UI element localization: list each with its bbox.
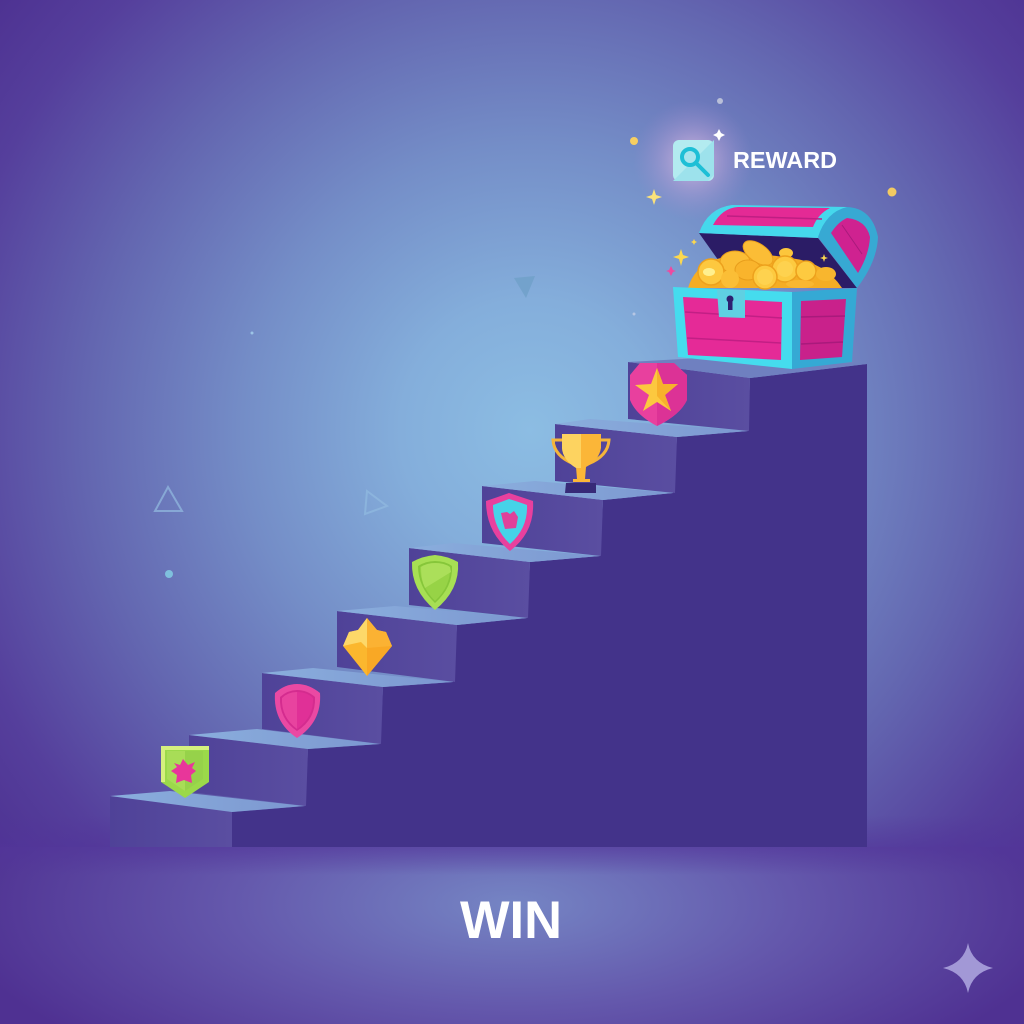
sparkles and gold dots (630, 98, 896, 316)
step 8 (628, 358, 867, 431)
reward label (633, 100, 837, 220)
icon: pink shield with gold star (630, 363, 687, 426)
icon: green shield with pink star (161, 746, 209, 798)
icon: pink and blue shield (486, 493, 533, 551)
staircase (110, 358, 867, 847)
chest latch with keyhole (717, 290, 745, 318)
chest lid (699, 205, 878, 288)
icon glow (633, 100, 753, 220)
label text: REWARD (733, 147, 837, 173)
decorative background shapes (155, 276, 805, 720)
icon: gold crystal (343, 618, 392, 676)
chest interior (699, 233, 857, 288)
icon: magnifier tile (673, 140, 714, 181)
step 7 (555, 419, 748, 493)
treasure chest (673, 205, 878, 369)
icon: pink shield (275, 684, 320, 738)
chest front (673, 287, 792, 369)
gold coins (688, 236, 842, 289)
step 6 (482, 481, 673, 556)
step 3 (262, 668, 453, 744)
step 4 (337, 606, 527, 682)
step 2 (189, 729, 380, 806)
chest side (792, 288, 857, 369)
step 1 (110, 791, 305, 847)
icon: green shield (412, 555, 458, 610)
step 5 (409, 543, 600, 618)
title: WIN (460, 891, 562, 950)
main dark block (232, 364, 867, 847)
icon: gold trophy (553, 434, 609, 493)
icon: corner sparkle (943, 943, 993, 993)
